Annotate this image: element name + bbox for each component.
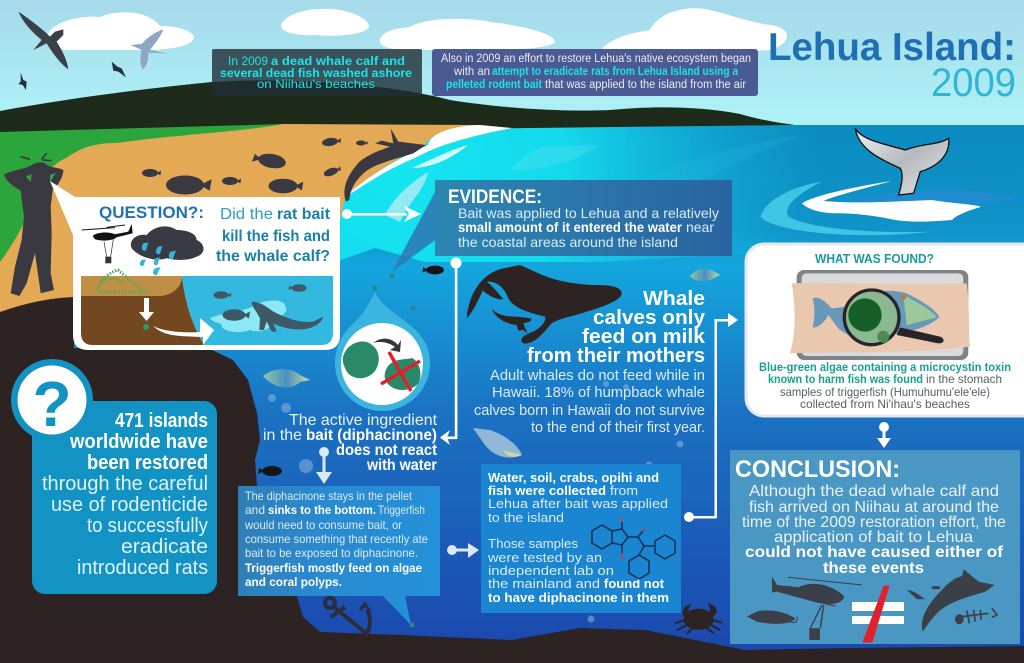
birds xyxy=(18,12,167,90)
whale calves text: calves born in Hawaii do not survive xyxy=(474,402,705,419)
icon: not equal sign xyxy=(852,586,904,642)
evidence pointer xyxy=(392,192,435,272)
diphacinone text: would need to consume bait, or xyxy=(244,518,402,532)
coastal water xyxy=(182,276,333,345)
water swirls xyxy=(520,135,800,250)
diphacinone text: sinks to the bottom. xyxy=(268,503,376,517)
water foam xyxy=(210,301,286,332)
title: 2009 xyxy=(931,61,1016,105)
Lehua restoration fact box: pelleted rodent bait xyxy=(446,79,542,91)
Niihau fact box: In 2009 xyxy=(228,54,268,68)
Lehua restoration fact box xyxy=(432,49,758,96)
stranded whale calf xyxy=(344,128,426,202)
islands text: introduced rats xyxy=(77,557,208,579)
sandy beach xyxy=(0,124,480,312)
panel: what was found xyxy=(746,244,1024,416)
samples text xyxy=(487,470,669,605)
active ingredient text: in the xyxy=(263,427,302,444)
samples text: to have diphacinone in them xyxy=(488,590,669,605)
whale calves text: to the end of their first year. xyxy=(531,419,705,436)
samples text: to the island xyxy=(488,510,564,525)
illustration: tray with triggerfish and magnifier xyxy=(790,270,970,360)
bait pellet xyxy=(143,324,149,330)
samples text: Lehua after bait was applied xyxy=(488,496,668,511)
islands text: use of rodenticide xyxy=(51,494,208,516)
icons: whale fish and fishbone xyxy=(907,569,997,632)
icon: rain cloud xyxy=(131,226,204,275)
diphacinone text: Triggerfish xyxy=(378,503,425,517)
Lehua restoration fact box: that was applied to the island from the air xyxy=(545,79,746,91)
title xyxy=(768,26,1016,105)
icon: whale and calf silhouette xyxy=(467,265,622,343)
found text: in the stomach xyxy=(926,372,1002,386)
panel: diphacinone xyxy=(238,486,440,625)
conclusion text: could not have caused either of xyxy=(745,544,1004,561)
diphacinone text: and xyxy=(245,503,265,517)
arrow: diphacinone to samples xyxy=(447,543,479,558)
conclusion heading: CONCLUSION: xyxy=(735,456,900,483)
conclusion text: Although the dead whale calf and xyxy=(749,483,999,500)
sky background xyxy=(0,0,1024,126)
small whale and fish in water xyxy=(214,284,323,332)
diphacinone text: The diphacinone stays in the pellet xyxy=(245,489,413,503)
islands text: been restored xyxy=(87,452,208,474)
found text: known to harm fish was found xyxy=(768,372,923,386)
samples text: the mainland and xyxy=(488,576,600,591)
whale calves heading xyxy=(527,288,706,367)
evidence text: the coastal areas around the island xyxy=(458,234,678,250)
Lehua restoration fact box: with an xyxy=(453,66,490,78)
samples text: Water, soil, crabs, opihi and xyxy=(488,470,659,485)
samples text: were tested by an xyxy=(487,550,602,565)
whale calves text xyxy=(474,367,705,436)
foam along shore xyxy=(345,125,512,197)
question text: Did the xyxy=(220,206,273,223)
Lehua restoration fact box: Also in 2009 an effort to restore Lehua's native ecosystem began xyxy=(441,53,751,65)
samples text: found not xyxy=(604,576,665,591)
samples text: from xyxy=(610,483,638,498)
shallow water glow xyxy=(250,125,830,262)
question text: kill the fish and xyxy=(222,228,330,245)
dead fish on beach xyxy=(142,136,368,194)
evidence text: small amount of it entered the water xyxy=(458,219,683,235)
icon: crab xyxy=(675,603,722,634)
samples text: Those samples xyxy=(488,536,579,551)
conclusion text: time of the 2009 restoration effort, the xyxy=(742,514,1006,531)
diphacinone text: and coral polyps. xyxy=(245,575,342,589)
islands text: eradicate xyxy=(121,536,208,558)
whale calves heading: from their mothers xyxy=(527,345,705,367)
diphacinone text: bait to be exposed to diphacinone. xyxy=(245,546,418,560)
bubbles xyxy=(268,381,684,622)
found text: collected from Ni'ihau's beaches xyxy=(800,397,970,411)
icon: question mark: ? xyxy=(32,368,72,440)
arrow: evidence to active ingredient xyxy=(440,258,462,445)
arrow: question to evidence xyxy=(342,206,421,222)
panel: conclusion xyxy=(730,450,1020,644)
icon: question mark xyxy=(18,366,86,440)
arrow: samples to what was found xyxy=(684,313,738,522)
active ingredient text: bait (diphacinone) xyxy=(306,427,437,444)
grass xyxy=(0,124,285,280)
islands text: to successfully xyxy=(87,515,208,537)
icon: bait drop with pellets xyxy=(335,292,430,411)
question text: rat bait xyxy=(277,206,331,223)
panel: water and soil samples xyxy=(481,464,681,613)
whale calves heading: calves only xyxy=(593,307,706,329)
islands text: worldwide have xyxy=(69,431,208,453)
whale calves text: Adult whales do not feed while in xyxy=(490,367,705,384)
Niihau fact box xyxy=(212,49,422,96)
panel: evidence xyxy=(435,180,732,256)
islands text: through the careful xyxy=(42,473,208,495)
evidence text xyxy=(458,205,719,250)
panel: question xyxy=(50,181,340,350)
evidence text: near xyxy=(686,219,714,235)
arrow: down to diphacinone panel xyxy=(316,447,332,484)
topsoil xyxy=(81,276,182,296)
Niihau fact box: several dead fish washed ashore xyxy=(220,66,412,80)
diphacinone text: consume something that recently ate xyxy=(245,532,428,546)
Lehua restoration fact box: attempt to eradicate rats from Lehua Island using a xyxy=(492,66,739,78)
clouds xyxy=(47,8,787,58)
Niihau fact box: a dead whale calf and xyxy=(271,54,405,68)
found text: samples of triggerfish (Humuhumu'ele'ele) xyxy=(780,385,990,399)
Niihau fact box: on Niihau's beaches xyxy=(257,77,375,91)
question heading: QUESTION?: xyxy=(99,203,204,222)
panel: 471 islands xyxy=(11,359,217,594)
whale tail with splash xyxy=(760,128,1019,235)
diphacinone text xyxy=(244,489,428,589)
found text xyxy=(759,360,1011,411)
samples text: independent lab on xyxy=(488,563,614,578)
active ingredient text: with water xyxy=(366,457,437,474)
speech tail xyxy=(383,596,411,625)
distant dark hill xyxy=(0,80,795,134)
conclusion text: application of bait to Lehua xyxy=(774,529,973,546)
whale calves heading: Whale xyxy=(643,288,705,310)
evidence heading: EVIDENCE: xyxy=(448,187,542,208)
active ingredient text: does not react xyxy=(336,442,438,459)
active ingredient text: The active ingredient xyxy=(289,412,438,429)
conclusion text xyxy=(742,483,1006,577)
title: Lehua Island: xyxy=(768,26,1016,69)
icons: helicopter and rat xyxy=(747,577,862,640)
icon: helicopter with bait bucket xyxy=(82,224,133,263)
bait pellets pile xyxy=(97,270,150,292)
dark rock foreground xyxy=(0,297,1024,663)
diphacinone text: Triggerfish mostly feed on algae xyxy=(245,561,422,575)
question text: the whale calf? xyxy=(216,248,330,265)
whale calves heading: feed on milk xyxy=(582,326,706,348)
evidence text: Bait was applied to Lehua and a relatively xyxy=(458,205,719,221)
conclusion text: fish arrived on Niihau at around the xyxy=(749,499,999,516)
white arrows in soil xyxy=(139,298,214,345)
small fish and triggerfish xyxy=(258,266,720,476)
found heading: WHAT WAS FOUND? xyxy=(815,251,934,266)
icon: anchor xyxy=(325,598,370,636)
soil cross-section xyxy=(81,276,204,345)
sinking pellets xyxy=(372,274,416,628)
islands text xyxy=(42,410,208,579)
foam streaks xyxy=(385,145,600,222)
samples text: fish were collected xyxy=(488,483,606,498)
islands text: 471 islands xyxy=(115,410,208,432)
arrow: found to conclusion xyxy=(877,422,891,448)
whale calves text: Hawaii. 18% of humpback whale xyxy=(492,384,705,401)
worried man silhouette xyxy=(4,153,63,296)
conclusion text: these events xyxy=(823,560,924,577)
icon: diphacinone molecule xyxy=(592,518,675,579)
question text xyxy=(216,206,331,265)
active ingredient text xyxy=(263,412,438,474)
